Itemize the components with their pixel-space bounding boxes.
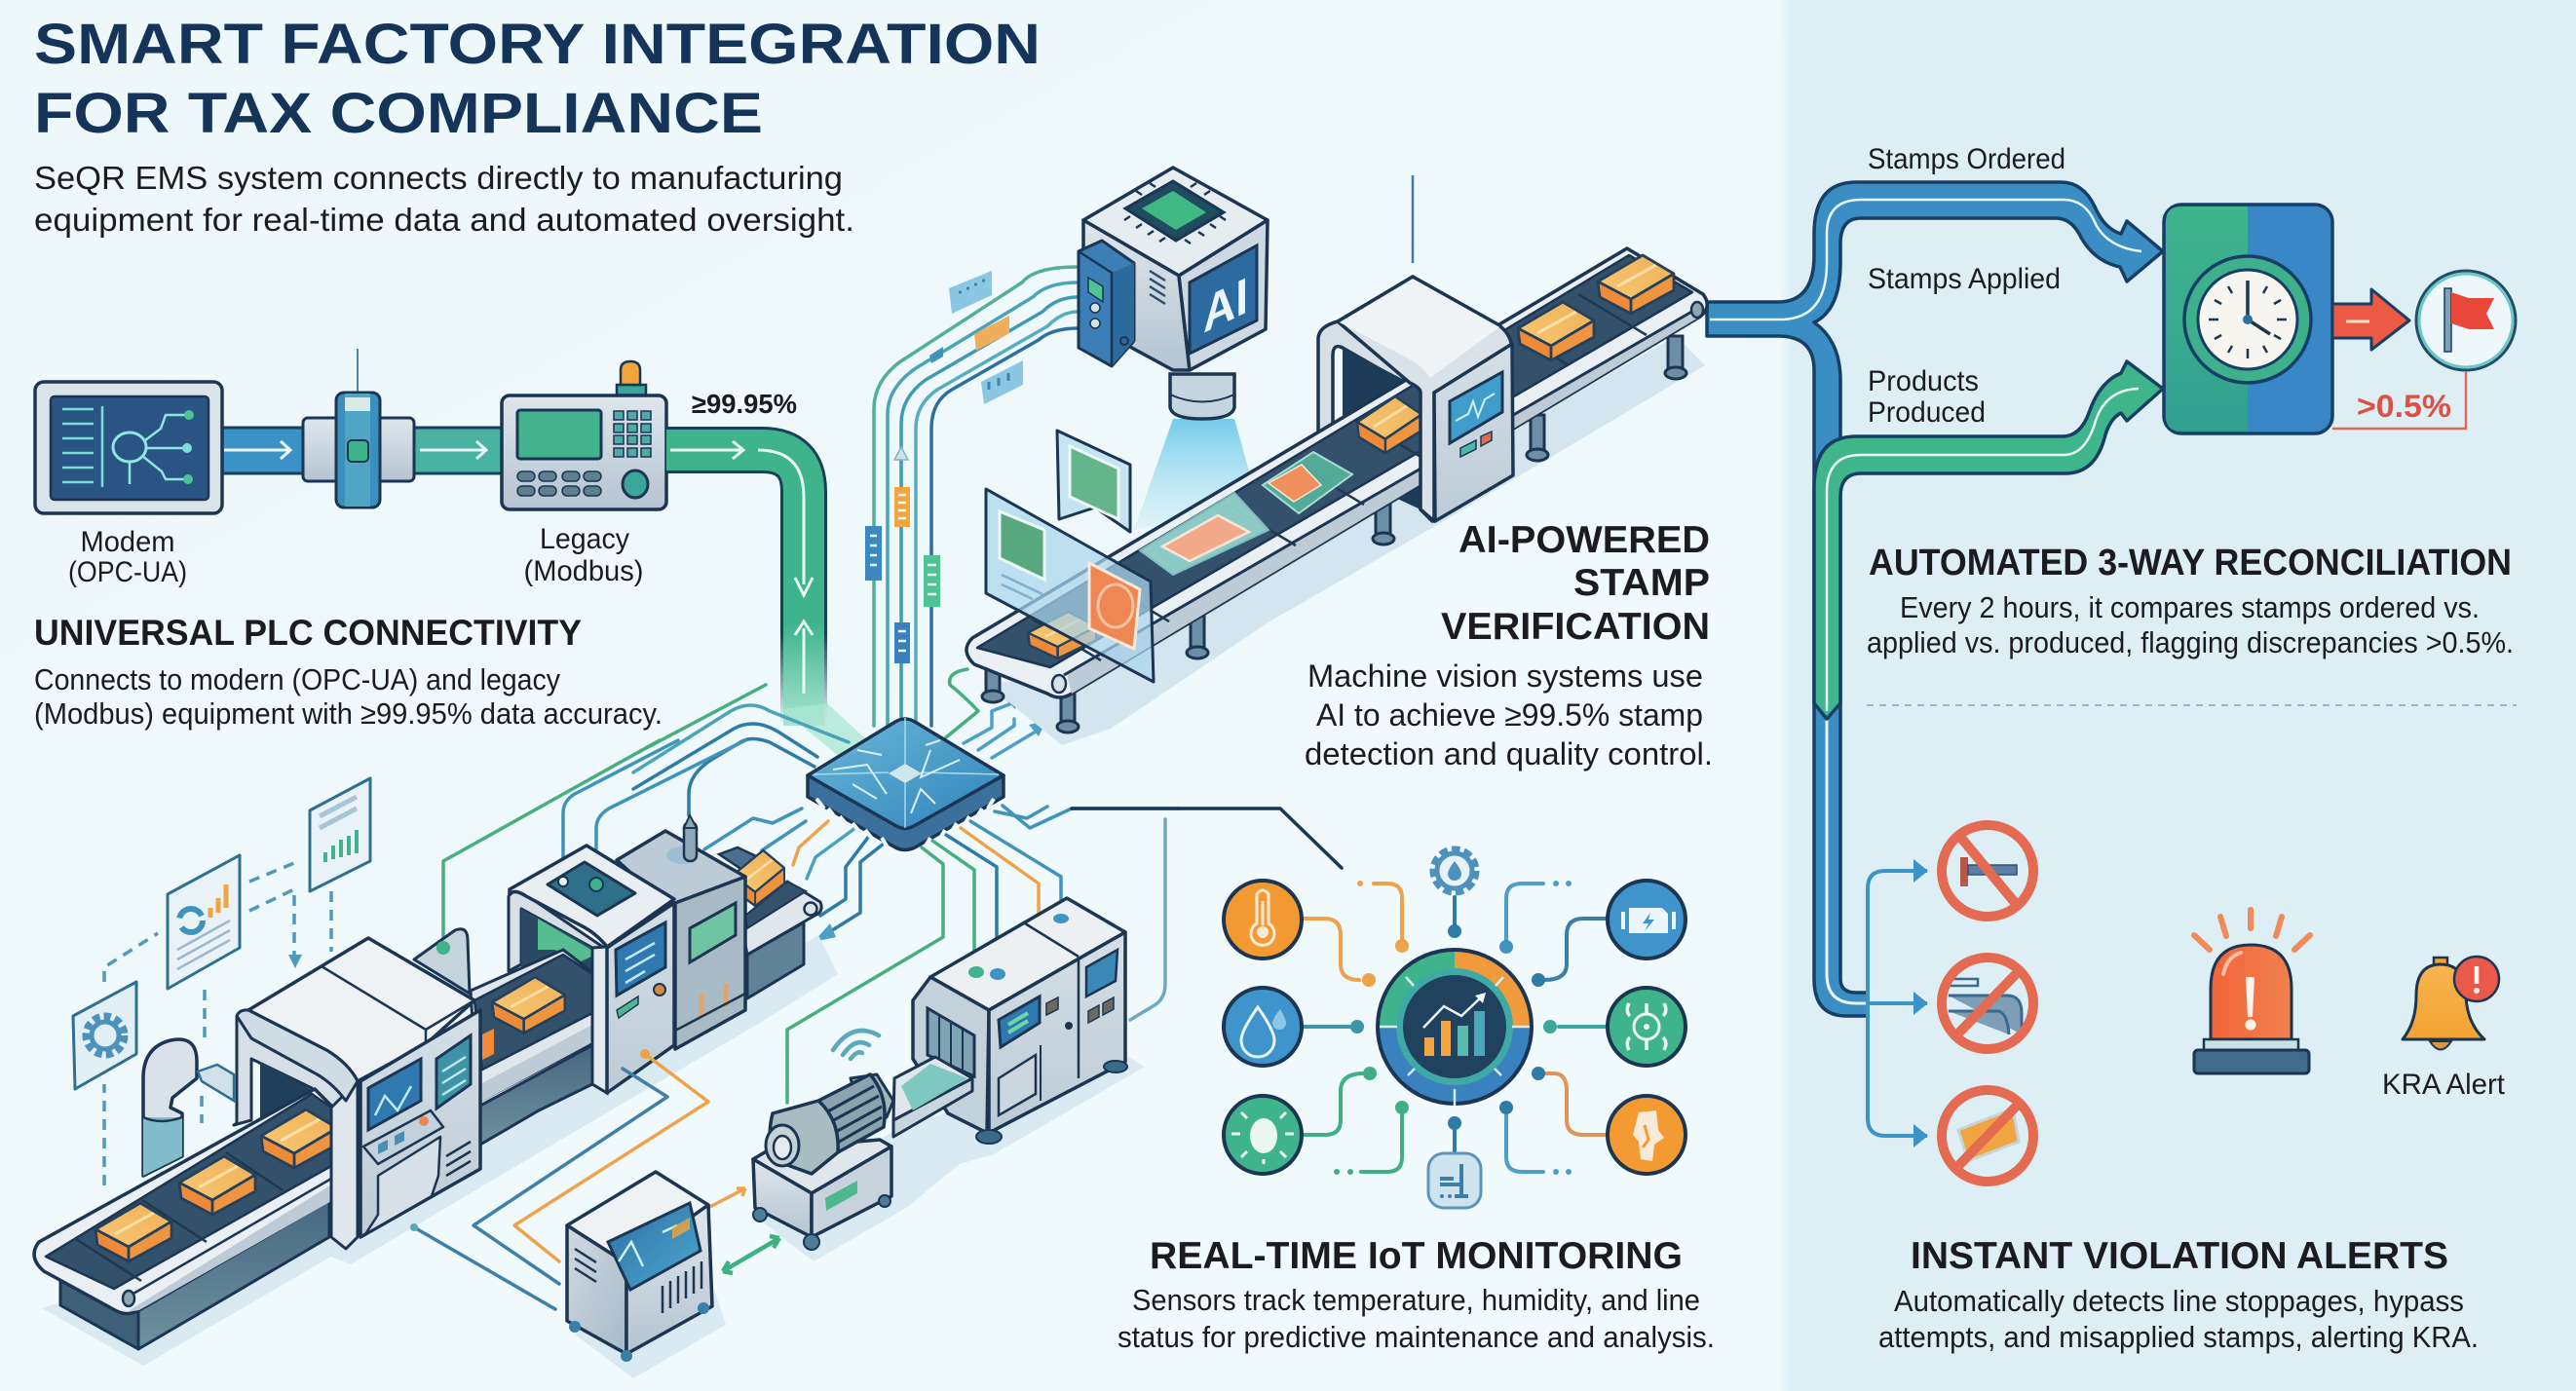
icon: circuit sensor (1608, 988, 1686, 1066)
arrow: red to flag (2332, 289, 2409, 350)
back conveyor with box (719, 847, 821, 998)
stamp sheets on belt (1140, 452, 1352, 575)
icon: coupling (303, 349, 414, 508)
heading: real-time IoT monitoring: REAL-TIME IoT MONITORING (1150, 1235, 1683, 1277)
heading: AI-powered stamp verification: AI-POWERED (1458, 519, 1710, 561)
arrow: blue trunk and branches (1707, 182, 2163, 1016)
text: reconciliation description: applied vs. produced, flagging discrepancies >0.5%. (1867, 625, 2514, 659)
icon: reconciliation clock unit (2164, 205, 2332, 433)
machine: front scanner unit (237, 938, 480, 1249)
icon: alarm siren (2194, 910, 2310, 1073)
title: FOR TAX COMPLIANCE (34, 82, 763, 145)
panel: universal PLC connectivity (34, 349, 867, 757)
tunnel scanner front (1338, 277, 1513, 521)
document card: chart (310, 778, 370, 891)
wires: connections from central chip (443, 267, 1342, 1103)
machine: middle scanner unit rear (509, 888, 607, 1093)
icon: no misapplied stamp (1942, 1090, 2033, 1182)
machine: right packaging unit (913, 898, 1127, 1144)
text: alerts description: attempts, and misapplied stamps, alerting KRA. (1878, 1320, 2479, 1354)
panel: real-time IoT monitoring (1118, 850, 1715, 1354)
wire tags on vertical bus (865, 447, 940, 663)
label: legacy: Legacy (540, 523, 629, 555)
icon: legacy PLC controller (502, 361, 666, 509)
icon: modern PLC screen (35, 382, 222, 513)
sensor probe (666, 815, 698, 864)
label: 99.95 percent: ≥99.95% (692, 389, 797, 419)
icon: data pipes (220, 428, 507, 473)
icon: no bypass (1942, 958, 2033, 1049)
document card: gear (73, 982, 136, 1089)
machine: rear tall unit (617, 831, 745, 1049)
heading: AI-powered stamp verification (1441, 519, 1710, 648)
label: stamps applied: Stamps Applied (1868, 263, 2061, 295)
tunnel scanner rear (1318, 321, 1432, 521)
conveyor belt upper (966, 248, 1707, 697)
subtitle (34, 160, 854, 238)
floating data tags (929, 271, 1023, 404)
icon: predictive analysis head (1608, 1096, 1686, 1174)
label: legacy (524, 523, 643, 587)
callout: discrepancy threshold: >0.5% (2357, 389, 2451, 424)
text: AI description: Machine vision systems use (1307, 658, 1703, 694)
icon: gear (1434, 850, 1475, 891)
subtitle: equipment for real-time data and automated oversight. (34, 202, 854, 238)
text: AI description: detection and quality control. (1305, 736, 1713, 771)
machine: front scanner unit rear (234, 1010, 346, 1164)
text: PLC description: (Modbus) equipment with ≥99.95% data accuracy. (34, 696, 663, 731)
arrow: green products branch (1814, 361, 2163, 719)
label: modern: Modem (80, 526, 175, 558)
connector lines (1303, 883, 1608, 1172)
label: stamps ordered: Stamps Ordered (1868, 143, 2065, 175)
middle conveyor (471, 950, 592, 1145)
small tablet behind machine (414, 929, 470, 994)
panel: instant violation alerts (1868, 825, 2506, 1354)
panel: automated 3-way reconciliation (1867, 143, 2516, 659)
text: reconciliation description: Every 2 hours, it compares stamps ordered vs. (1900, 590, 2480, 624)
machine: middle scanner unit front (510, 846, 674, 1093)
text: IoT description: Sensors track temperature, humidity, and line (1132, 1283, 1700, 1317)
icon: light status (1224, 1096, 1302, 1174)
heading: universal PLC connectivity: UNIVERSAL PLC CONNECTIVITY (34, 613, 582, 653)
label: products produced (1868, 365, 1986, 429)
machine: motor (753, 1074, 893, 1250)
text: PLC description (34, 662, 663, 731)
box inside tunnel (1357, 396, 1421, 453)
panel: lower-left factory line (34, 778, 1145, 1378)
panel: right column (1779, 0, 2576, 1391)
floor shadows (42, 935, 838, 1366)
title (34, 13, 1041, 145)
wires: kiosk links (410, 1049, 779, 1309)
icon: wifi (833, 1031, 879, 1059)
AI camera (1079, 168, 1268, 419)
heading: instant violation alerts: INSTANT VIOLATION ALERTS (1911, 1235, 2448, 1277)
label: modern: (OPC-UA) (68, 556, 187, 588)
conveyor belt lower (34, 1089, 337, 1349)
callout: discrepancy threshold (2332, 371, 2466, 429)
pipe elbow (143, 1039, 234, 1176)
title: SMART FACTORY INTEGRATION (34, 13, 1041, 76)
antenna line (1412, 175, 1414, 263)
icon: light cone (1134, 419, 1259, 530)
text: AI description (1305, 658, 1713, 771)
text: AI description: AI to achieve ≥99.5% stamp (1316, 697, 1703, 733)
label: modern (68, 526, 187, 588)
label: legacy: (Modbus) (524, 555, 643, 587)
mini conveyor to motor (893, 1057, 972, 1137)
icon: central processor chip (808, 718, 1004, 849)
icon: flag (2416, 271, 2516, 370)
icon: no line stoppage (1942, 825, 2033, 917)
text: IoT description: status for predictive maintenance and analysis. (1118, 1320, 1715, 1354)
icon: central dashboard gauge (1376, 948, 1534, 1106)
heading: AI-powered stamp verification: VERIFICATION (1441, 606, 1710, 648)
conveyor shadow (984, 336, 1705, 745)
text: alerts description (1878, 1284, 2479, 1354)
text: IoT description (1118, 1283, 1715, 1354)
heading: AI-powered stamp verification: STAMP (1573, 562, 1710, 604)
icon: humidity (1224, 988, 1302, 1066)
document card: report (168, 855, 240, 989)
icon: engine (1608, 881, 1686, 959)
label: products produced: Products (1868, 365, 1979, 397)
text: PLC description: Connects to modern (OPC-UA) and legacy (34, 662, 560, 696)
boxes on conveyor (1518, 255, 1674, 360)
label: KRA alert: KRA Alert (2382, 1069, 2506, 1101)
panel: AI stamp verification (966, 168, 1713, 771)
heading: automated reconciliation: AUTOMATED 3-WAY RECONCILIATION (1869, 543, 2512, 583)
label: products produced: Produced (1868, 396, 1986, 429)
icon: line status card (1428, 1153, 1481, 1208)
arrow: three-way alert branch (1868, 871, 1927, 1136)
text: AI: AI (1203, 266, 1248, 344)
dashed data links (104, 863, 331, 1185)
conveyor legs (982, 336, 1686, 733)
text: reconciliation description (1867, 590, 2514, 659)
subtitle: SeQR EMS system connects directly to manufacturing (34, 160, 843, 196)
icon: KRA bell (2403, 957, 2499, 1050)
icon: temperature (1224, 881, 1302, 959)
text: alerts description: Automatically detects line stoppages, hypass (1894, 1284, 2464, 1318)
arrow: green data pipe to chip (666, 441, 867, 757)
machine: monitoring kiosk (567, 1172, 712, 1362)
holographic inspection panels (986, 431, 1154, 682)
